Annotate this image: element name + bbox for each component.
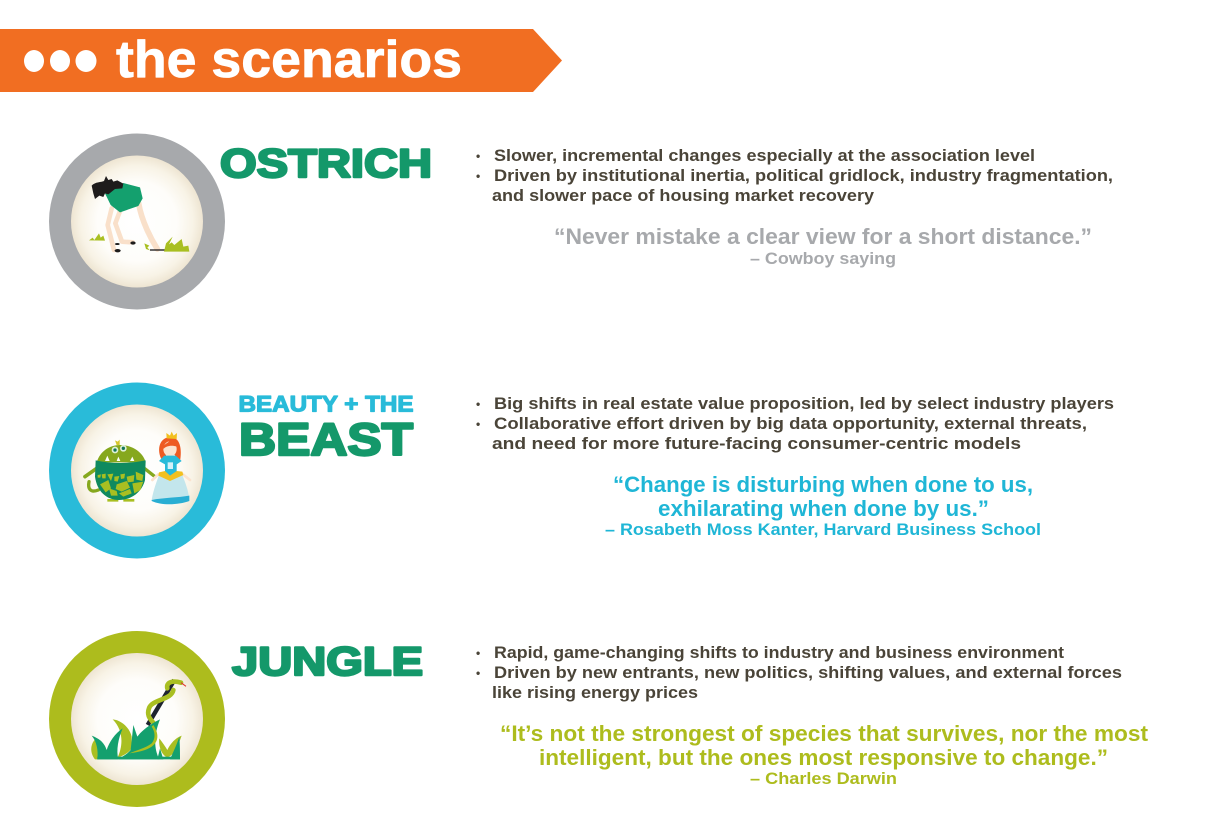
heading: JUNGLE: JUNGLE — [232, 640, 423, 684]
heading: BEAUTY + THE BEAST: BEAUTY + THE — [238, 392, 414, 416]
banner: the scenarios — [0, 29, 562, 92]
quote: Kanter — [605, 472, 1041, 539]
text block: beast bullets: Big shifts in real estate value proposition, led by select industry players — [494, 395, 1114, 413]
heading: BEAUTY + THE BEAST — [238, 392, 414, 465]
text block: ostrich bullets: and slower pace of housing market recovery — [492, 187, 875, 205]
text block: jungle bullets: Rapid, game-changing shifts to industry and business environment — [494, 644, 1065, 662]
icon: snake and grass in circle — [49, 631, 225, 807]
text block: jungle bullets: Driven by new entrants, new politics, shifting values, and external forces — [494, 664, 1122, 682]
banner title: the scenarios — [116, 31, 462, 89]
text block: beast bullets — [476, 395, 1114, 453]
text block: beast bullets: Collaborative effort driven by big data opportunity, external threats, — [494, 415, 1087, 433]
quote: cowboy saying: – Cowboy saying — [750, 250, 896, 268]
text block: jungle bullets: like rising energy prices — [492, 684, 698, 702]
quote: Kanter: “Change is disturbing when done to us, — [613, 472, 1033, 497]
heading: OSTRICH: OSTRICH — [220, 142, 432, 186]
text block: beast bullets: • — [476, 417, 480, 431]
text block: ostrich bullets: • — [476, 169, 480, 183]
text block: beast bullets: and need for more future-facing consumer-centric models — [492, 435, 1021, 453]
quote: Darwin: – Charles Darwin — [750, 770, 897, 788]
quote: Darwin: intelligent, but the ones most responsive to change.” — [539, 745, 1108, 770]
text block: ostrich bullets: Driven by institutional inertia, political gridlock, industry fragmentation, — [494, 167, 1113, 185]
panel: jungle scenario — [49, 631, 1149, 807]
panel: beauty and the beast scenario — [49, 382, 1114, 558]
quote: Kanter: – Rosabeth Moss Kanter, Harvard Business School — [605, 521, 1041, 539]
heading: BEAUTY + THE BEAST: BEAST — [239, 414, 413, 465]
quote: cowboy saying: “Never mistake a clear view for a short distance.” — [554, 224, 1092, 249]
quote: Darwin — [500, 721, 1149, 788]
text block: ostrich bullets: Slower, incremental changes especially at the association level — [494, 147, 1035, 165]
text block: ostrich bullets: • — [476, 149, 480, 163]
icon: ostrich in circle — [49, 134, 225, 310]
quote: Darwin: “It’s not the strongest of species that survives, nor the most — [500, 721, 1149, 746]
text block: ostrich bullets — [476, 147, 1113, 205]
text block: jungle bullets: • — [476, 666, 480, 680]
banner dots — [24, 50, 96, 72]
text block: jungle bullets — [476, 644, 1122, 702]
quote: cowboy saying — [554, 224, 1092, 268]
quote: Kanter: exhilarating when done by us.” — [658, 496, 989, 521]
text block: jungle bullets: • — [476, 646, 480, 660]
text block: beast bullets: • — [476, 397, 480, 411]
icon: beast and princess in circle — [49, 382, 225, 558]
panel: ostrich scenario — [49, 134, 1113, 310]
